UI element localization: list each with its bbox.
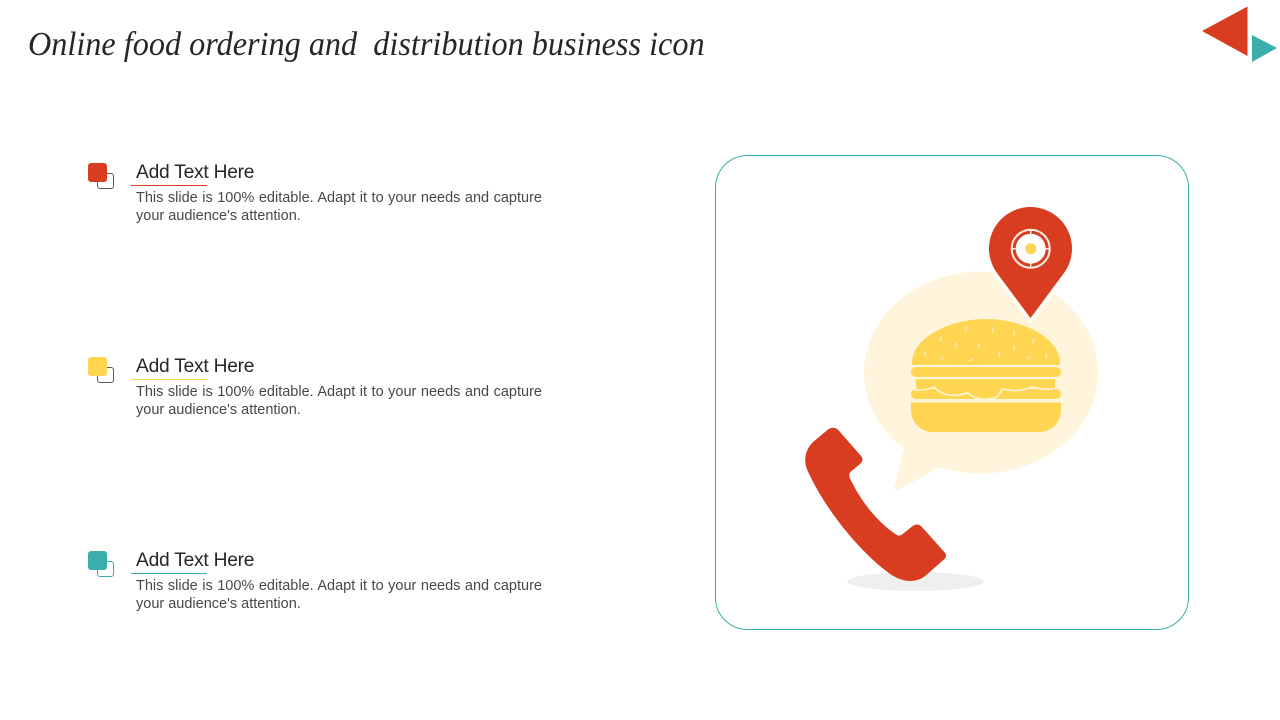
heading 3: Add Text Here: [136, 550, 254, 571]
text block 2: This slide is 100% editable. Adapt it to your needs and capture your audience's attention.: [136, 384, 542, 418]
text block 1: This slide is 100% editable. Adapt it to your needs and capture your audience's attention.: [136, 190, 542, 224]
icon: burger: [911, 319, 1061, 432]
heading 1: Add Text Here: [136, 162, 254, 183]
title: Online food ordering and distribution business icon: [28, 26, 705, 63]
underline 1: [131, 185, 207, 186]
heading 2: Add Text Here: [136, 356, 254, 377]
icon: corner triangles: [1202, 6, 1277, 62]
icon: yellow square bullet: [88, 357, 114, 383]
seeds: [924, 327, 1046, 361]
icon: red square bullet: [88, 163, 114, 189]
icon: telephone handset: [805, 428, 946, 581]
icon: location pin: [989, 207, 1072, 322]
shadow under phone: [848, 572, 984, 591]
underline 2: [131, 379, 207, 380]
icon: speech bubble: [864, 272, 1098, 490]
underline 3: [131, 573, 207, 574]
list item 2: [88, 356, 542, 418]
text block 3: This slide is 100% editable. Adapt it to your needs and capture your audience's attention.: [136, 578, 542, 612]
list item 3: [88, 550, 542, 612]
panel: illustration card: [715, 155, 1189, 630]
list item 1: [88, 162, 542, 224]
icon: teal square bullet: [88, 551, 114, 577]
